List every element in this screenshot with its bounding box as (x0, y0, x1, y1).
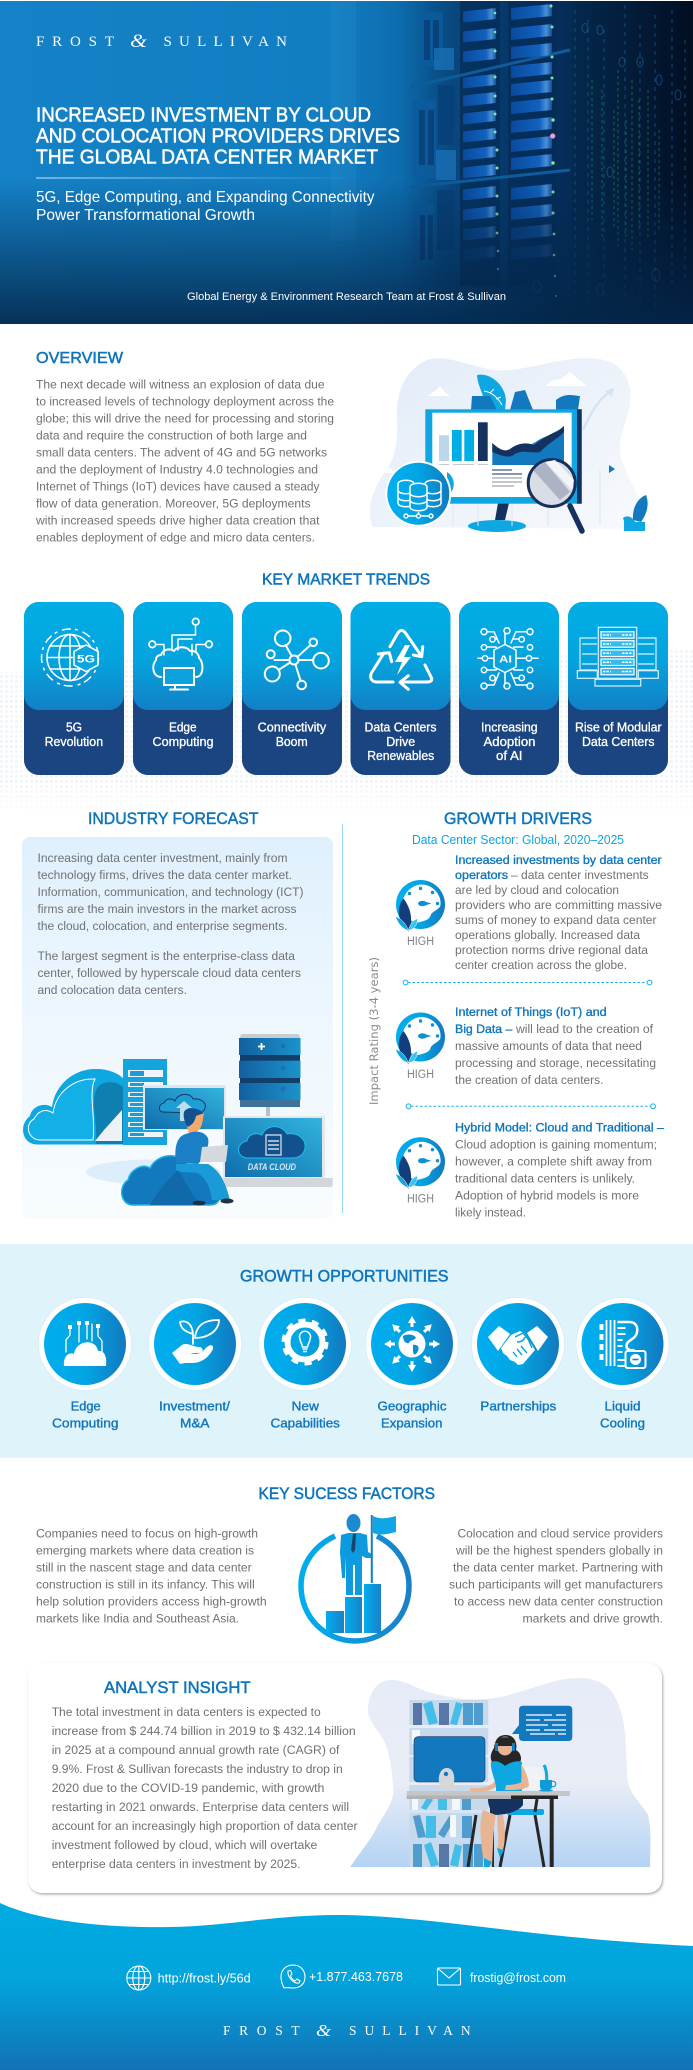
driver 3 text: however, a complete shift away from (455, 1155, 652, 1169)
overview body text: data and require the construction of both large and (36, 429, 307, 443)
icon: handshake (488, 1326, 548, 1365)
label: Cooling (600, 1416, 645, 1431)
contact: email: frostig@frost.com (470, 1971, 566, 1985)
opportunity: Geographic Expansion (366, 1298, 458, 1431)
coffee cup (539, 1780, 556, 1792)
contact: website (127, 1966, 251, 1990)
success heading: KEY SUCESS FACTORS (258, 1485, 435, 1503)
overview body text: The next decade will witness an explosion of data due (36, 378, 325, 392)
card: Rise of Modular Data Centers (568, 602, 668, 775)
driver 2 text: will lead to the creation of (515, 1022, 654, 1036)
icon: globe (127, 1966, 151, 1990)
driver 1 text (455, 853, 662, 972)
driver 3 (396, 1121, 664, 1220)
card label: Renewables (367, 749, 434, 763)
analyst body text: account for an increasingly high proportion of data center (52, 1819, 357, 1833)
icon: 5G globe (42, 629, 98, 686)
forecast body text: technology firms, drives the data center market. (38, 868, 292, 882)
card label: Computing (152, 735, 214, 749)
driver 1 text: providers who are committing massive (455, 898, 662, 912)
left text: still in the nascent stage and data center (36, 1560, 252, 1574)
laptop: DATA CLOUD (248, 1162, 296, 1172)
decorative data-center skyline pattern (0, 650, 693, 815)
icon: envelope (438, 1968, 460, 1985)
overview body text: enables deployment of edge and micro data centers. (36, 531, 315, 545)
rating: HIGH (407, 1069, 434, 1081)
title (36, 104, 400, 168)
banner bottom shading (0, 1, 693, 324)
card label (45, 721, 103, 749)
driver 2 text (455, 1005, 656, 1087)
chair (468, 1765, 547, 1867)
panel: analyst insight (28, 1663, 662, 1893)
opportunity: Edge Computing (38, 1298, 132, 1431)
label: Geographic (378, 1399, 447, 1414)
section: growth opportunities (0, 1244, 693, 1458)
card: Increasing Adoption of AI (459, 602, 559, 775)
card (28, 1663, 662, 1893)
driver 1 text: – data center investments (511, 868, 649, 882)
driver 2 text: Big Data – (455, 1022, 513, 1036)
forecast body text: firms are the main investors in the market across (38, 902, 296, 916)
card label: Adoption (484, 735, 536, 749)
card label: 5G (66, 721, 82, 735)
upload monitor (143, 1085, 226, 1130)
logo: Frost & Sullivan: FROST (36, 34, 114, 50)
analyst body text: restarting in 2021 onwards. Enterprise data centers will (52, 1800, 349, 1814)
title: THE GLOBAL DATA CENTER MARKET (36, 146, 378, 168)
analyst heading: ANALYST INSIGHT (104, 1679, 251, 1697)
right text: to access new data center construction (454, 1594, 663, 1608)
label (378, 1399, 447, 1431)
logo: Frost & Sullivan: FROST (223, 2023, 300, 2038)
growth drivers subtitle: Data Center Sector: Global, 2020–2025 (412, 832, 624, 847)
card label: Rise of Modular (575, 721, 662, 735)
decorative lighter band (331, 1, 356, 241)
overview heading: OVERVIEW (36, 350, 124, 367)
label: Computing (52, 1416, 118, 1431)
forecast body text: Information, communication, and technology (ICT) (38, 885, 304, 899)
card label: Drive (386, 735, 415, 749)
contact: email (438, 1968, 566, 1985)
logo: Frost & Sullivan (223, 2021, 471, 2040)
forecast body text: center, followed by hyperscale cloud data centers (38, 966, 301, 980)
left text: construction is still in its infancy. This will (36, 1577, 255, 1591)
label: Partnerships (480, 1399, 557, 1414)
logo: Frost & Sullivan: SULLIVAN (164, 34, 287, 50)
label: Investment/ (159, 1399, 230, 1414)
driver 1 text: protection norms drive regional data (455, 943, 648, 957)
analyst body text: 2020 due to the COVID-19 pandemic, with growth (52, 1781, 325, 1795)
axis label: impact rating: Impact Rating (3-4 years) (367, 957, 381, 1105)
driver 1 text: Increased investments by data center (455, 853, 662, 867)
driver 2 text: the creation of data centers. (455, 1073, 604, 1087)
driver 1 text: operations globally. Increased data (455, 928, 640, 942)
label (270, 1399, 340, 1431)
banner background (0, 1, 693, 324)
card label (258, 721, 327, 749)
icon: phone bubble (281, 1965, 305, 1988)
card label: Increasing (481, 721, 538, 735)
column divider (342, 824, 344, 1213)
label (52, 1399, 118, 1431)
card label (575, 721, 662, 749)
forecast panel (22, 837, 333, 1219)
card label: Edge (169, 721, 197, 735)
opportunity: New Capabilities (258, 1298, 352, 1431)
icon: globe with arrows (384, 1316, 440, 1372)
analyst body text: enterprise data centers in investment by 2025. (52, 1857, 301, 1871)
cloud with document (238, 1127, 305, 1158)
icon: gear and bulb (284, 1321, 326, 1363)
card: Data Centers Drive Renewables (350, 602, 450, 775)
icon: modular servers (577, 627, 658, 686)
overview body text: globe; this will drive the need for processing and storing (36, 412, 334, 426)
label: New (292, 1399, 320, 1414)
driver 3 text: Adoption of hybrid models is more (455, 1189, 639, 1203)
card label: Revolution (45, 735, 103, 749)
label (600, 1399, 645, 1431)
card label: Boom (276, 735, 308, 749)
driver 1 text: are led by cloud and colocation (455, 883, 619, 897)
icon: liquid cooled chip (600, 1320, 646, 1368)
research team credit: Global Energy & Environment Research Team at Frost & Sullivan (187, 291, 506, 303)
card label (364, 721, 436, 763)
card label: Data Centers (582, 735, 654, 749)
overview body text: with increased speeds drive higher data creation that (35, 514, 320, 528)
left text: emerging markets where data creation is (36, 1543, 254, 1557)
driver 3 text: likely instead. (455, 1206, 526, 1220)
forecast body text (38, 851, 304, 997)
gauge icon (396, 1012, 445, 1064)
icon: AI chip (478, 628, 538, 689)
left text: Companies need to focus on high-growth (36, 1526, 258, 1540)
analyst illustration: woman at desk (350, 1678, 650, 1867)
binary code streaks (533, 5, 685, 310)
contact: website: http://frost.ly/56d (158, 1972, 251, 1986)
section: key market trends (24, 572, 668, 775)
left text (36, 1526, 267, 1625)
contact: phone: +1.877.463.7678 (309, 1970, 403, 1984)
forecast heading: INDUSTRY FORECAST (88, 809, 258, 828)
driver 3 text: Hybrid Model: Cloud and Traditional – (455, 1121, 664, 1135)
forecast body text: and colocation data centers. (38, 983, 187, 997)
driver 1 (396, 853, 662, 972)
overview body text: small data centers. The advent of 4G and 5G networks (36, 446, 327, 460)
database stack (239, 1034, 300, 1117)
rating: HIGH (407, 936, 434, 948)
icon: AI chip: AI (499, 653, 512, 665)
left cloud (23, 1069, 124, 1145)
person on cloud (122, 1108, 234, 1205)
label (159, 1399, 230, 1431)
label: Edge (71, 1399, 101, 1414)
forecast body text: the cloud, colocation, and enterprise segments. (38, 919, 288, 933)
driver 2 text: processing and storage, necessitating (455, 1056, 656, 1070)
gauge icon (396, 1137, 445, 1189)
title divider (36, 178, 346, 179)
card: Edge Computing (133, 602, 233, 775)
logo: Frost & Sullivan: SULLIVAN (349, 2023, 471, 2038)
overview body text: flow of data generation. Moreover, 5G deployments (36, 497, 310, 511)
driver 2 text: Internet of Things (IoT) and (455, 1005, 607, 1019)
database badge (385, 461, 451, 527)
driver 3 text: traditional data centers is unlikely. (455, 1172, 635, 1186)
card label: Connectivity (258, 721, 327, 735)
icon: edge cloud (149, 618, 212, 690)
analyst body text: in 2025 at a compound annual growth rate (CAGR) of (52, 1743, 340, 1757)
overview illustration: dashboard monitor (370, 358, 648, 532)
section: growth drivers (367, 809, 664, 1220)
subtitle: Power Transformational Growth (36, 207, 255, 224)
title: AND COLOCATION PROVIDERS DRIVES (36, 124, 400, 148)
right text (449, 1526, 663, 1625)
icon: 5G globe: 5G (77, 654, 95, 666)
forecast body text: Increasing data center investment, mainly from (38, 851, 288, 865)
opportunity: Investment M&A (148, 1298, 242, 1431)
laptop (223, 1116, 333, 1187)
analyst body text: 9.9%. Frost & Sullivan forecasts the industry to drop in (52, 1762, 343, 1776)
forecast body text: The largest segment is the enterprise-class data (38, 949, 295, 963)
driver 3 text: Cloud adoption is gaining momentum; (455, 1138, 657, 1152)
left text: help solution providers access high-growth (36, 1594, 267, 1608)
driver 2 (396, 1005, 656, 1087)
label: Capabilities (270, 1416, 340, 1431)
logo: Frost & Sullivan: & (130, 31, 147, 52)
label: Liquid (604, 1399, 640, 1414)
mini bar chart (439, 422, 488, 464)
opportunity: Liquid Cooling (576, 1298, 669, 1431)
overview body text: to increased levels of technology deployment across the (36, 395, 334, 409)
gauge icon (396, 880, 445, 932)
left text: markets like India and Southeast Asia. (36, 1611, 239, 1625)
analyst body text: increase from $ 244.74 billion in 2019 to $ 432.14 billion (52, 1724, 356, 1738)
footer (0, 1903, 693, 2070)
trends heading: KEY MARKET TRENDS (262, 572, 430, 589)
analyst body text: The total investment in data centers is expected to (52, 1705, 321, 1719)
overview body text: Internet of Things (IoT) devices have caused a steady (36, 480, 320, 494)
subtitle: 5G, Edge Computing, and Expanding Connectivity (36, 189, 375, 206)
section: overview (35, 350, 648, 545)
logo: Frost & Sullivan: & (316, 2021, 332, 2040)
driver 2 text: massive amounts of data that need (455, 1039, 642, 1053)
analyst body text: investment followed by cloud, which will overtake (52, 1838, 317, 1852)
logo: Frost & Sullivan (36, 31, 287, 52)
overview body text: and the deployment of Industry 4.0 technologies and (36, 463, 318, 477)
contact: phone (281, 1965, 403, 1988)
icon: recycle lightning (371, 630, 432, 689)
rating: HIGH (407, 1194, 434, 1206)
computer monitor (414, 1737, 485, 1789)
section: key success factors (36, 1485, 663, 1641)
icon: connectivity network (265, 630, 329, 689)
card label: Data Centers (364, 721, 436, 735)
server rack (123, 1059, 167, 1145)
desk (407, 1791, 570, 1867)
growth drivers heading: GROWTH DRIVERS (444, 809, 592, 828)
section: industry forecast (22, 809, 333, 1219)
subtitle (36, 189, 375, 224)
analyst body text (52, 1705, 357, 1871)
server rack photo (400, 1, 572, 297)
icon: cloud circuit (64, 1321, 106, 1366)
opportunity: Partnerships (472, 1298, 564, 1414)
label: Expansion (381, 1416, 442, 1431)
title: INCREASED INVESTMENT BY CLOUD (36, 104, 371, 126)
opportunities heading: GROWTH OPPORTUNITIES (240, 1268, 448, 1286)
card: Connectivity Boom (242, 602, 342, 775)
overview body text (35, 378, 334, 545)
header banner (0, 1, 693, 324)
card label (152, 721, 214, 749)
right text: Colocation and cloud service providers (458, 1526, 663, 1540)
card: 5G Revolution (24, 602, 124, 775)
label: M&A (180, 1416, 210, 1431)
footer wave (0, 1903, 693, 2070)
card label (481, 721, 538, 763)
icon: hand and plant (172, 1320, 219, 1364)
plant (623, 495, 648, 531)
driver 1 text: sums of money to expand data center (455, 913, 656, 927)
driver 1 text: operators (455, 868, 508, 882)
right text: the data center market. Partnering with (453, 1560, 663, 1574)
card label: of AI (496, 749, 522, 763)
speech bubble (512, 1706, 572, 1741)
driver 1 text: center creation across the globe. (455, 958, 627, 972)
bookshelf (409, 1700, 488, 1867)
mini area chart (492, 426, 564, 465)
right text: such participants will get manufacturers (449, 1577, 663, 1591)
driver 3 text (455, 1121, 664, 1220)
woman (470, 1735, 529, 1867)
forecast illustration: cloud data center (23, 1034, 333, 1205)
right text: markets and drive growth. (522, 1611, 663, 1625)
icon: leader on bars with flag (301, 1514, 409, 1641)
band background (0, 1244, 693, 1458)
right text: will be the highest spenders globally in (455, 1543, 663, 1557)
